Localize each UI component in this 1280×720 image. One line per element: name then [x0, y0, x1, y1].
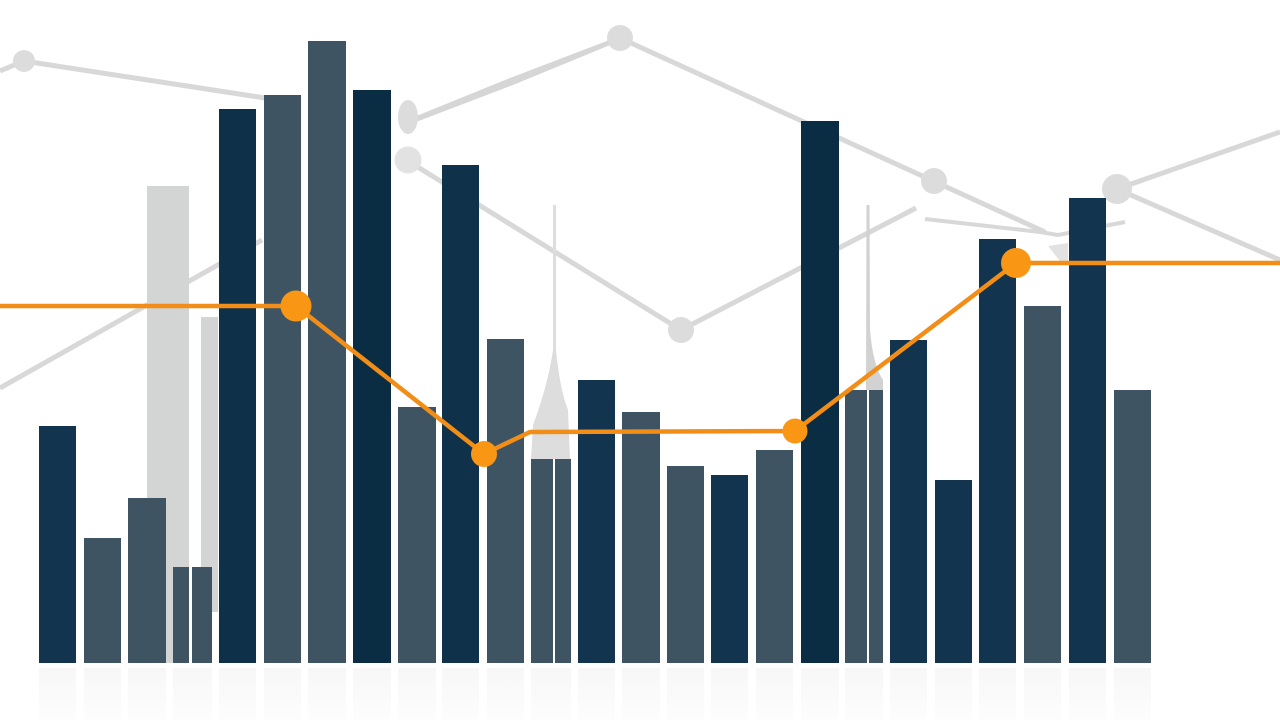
- orange trend line: [0, 263, 1280, 454]
- background grey spikes: [531, 205, 883, 459]
- small wedge under the right line: [1048, 243, 1068, 261]
- tapered line between top markers: [414, 39, 615, 122]
- bar reflections: [39, 668, 1151, 720]
- orange line markers: [280, 248, 1031, 467]
- background grey lines: [0, 38, 1280, 388]
- bars: dark navy: [39, 90, 1106, 663]
- bars: slate: [84, 41, 1151, 663]
- background grey bars: [147, 186, 218, 663]
- background grey line markers: [13, 25, 1132, 343]
